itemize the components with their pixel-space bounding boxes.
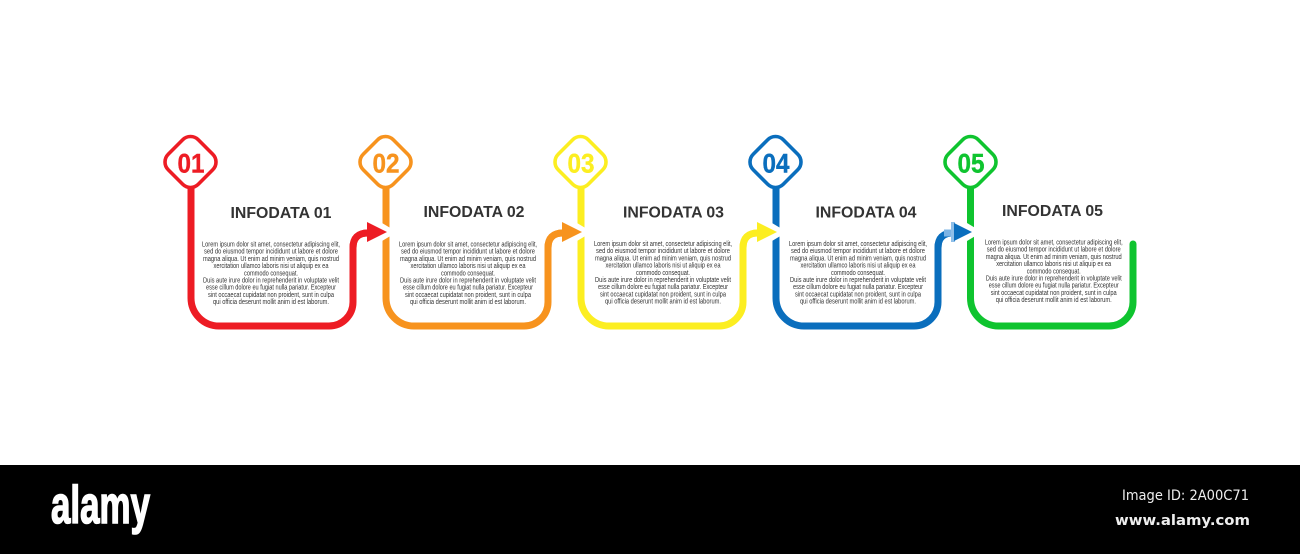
heading 03: INFODATA 03 xyxy=(623,204,724,222)
footer band xyxy=(0,465,1300,554)
body text 01: Lorem ipsum dolor sit amet, consectetur adipiscing elit, xyxy=(202,242,340,248)
body text 05: sed do eiusmod tempor incididunt ut labore et dolore xyxy=(987,247,1121,254)
body text 02 xyxy=(399,242,537,306)
badge 01: 01 xyxy=(178,148,204,178)
body text 04: magna aliqua. Ut enim ad minim veniam, quis nostrud xyxy=(790,255,926,262)
connector line 03 xyxy=(581,188,758,326)
connector line 02 xyxy=(386,188,563,326)
body text 04: Duis aute irure dolor in reprehenderit in voluptate velit xyxy=(790,277,926,284)
badge 02 xyxy=(355,132,416,192)
badge 04: 04 xyxy=(762,148,790,178)
body text 01: qui officia deserunt mollit anim id est laborum. xyxy=(213,299,329,306)
body text 05: Lorem ipsum dolor sit amet, consectetur adipiscing elit, xyxy=(985,240,1123,246)
body text 02: esse cillum dolore eu fugiat nulla pariatur. Excepteur xyxy=(403,285,534,292)
body text 02: sint occaecat cupidatat non proident, sunt in culpa xyxy=(405,292,531,299)
body text 03: Duis aute irure dolor in reprehenderit in voluptate velit xyxy=(595,277,731,284)
body text 02: Duis aute irure dolor in reprehenderit in voluptate velit xyxy=(400,278,536,284)
body text 05 xyxy=(985,240,1123,304)
badge 05: 05 xyxy=(958,148,984,178)
body text 03 xyxy=(594,241,732,306)
body text 03: qui officia deserunt mollit anim id est laborum. xyxy=(605,299,721,306)
heading 04: INFODATA 04 xyxy=(816,204,917,222)
body text 02: commodo consequat. xyxy=(441,270,495,277)
connector line 01 xyxy=(191,188,368,326)
body text 05: commodo consequat. xyxy=(1027,268,1081,275)
step 1: Infodata 01 xyxy=(160,132,368,326)
body text 05: xercitation ullamco laboris nisi ut aliquip ex ea xyxy=(996,261,1111,268)
body text 04: commodo consequat. xyxy=(831,270,885,277)
image id: Image ID: 2A00C71 xyxy=(1122,488,1249,504)
body text 05: esse cillum dolore eu fugiat nulla pariatur. Excepteur xyxy=(989,283,1119,290)
badge 02: 02 xyxy=(372,148,400,178)
body text 01: esse cillum dolore eu fugiat nulla pariatur. Excepteur xyxy=(206,285,337,292)
body text 03: esse cillum dolore eu fugiat nulla pariatur. Excepteur xyxy=(598,284,729,291)
badge 05 xyxy=(940,132,1001,192)
body text 05: qui officia deserunt mollit anim id est laborum. xyxy=(996,297,1112,304)
heading 05: INFODATA 05 xyxy=(1002,203,1103,220)
body text 01: magna aliqua. Ut enim ad minim veniam, quis nostrud xyxy=(203,256,339,263)
body text 04: xercitation ullamco laboris nisi ut aliquip ex ea xyxy=(800,263,916,270)
body text 01: sed do eiusmod tempor incididunt ut labore et dolore xyxy=(204,249,338,256)
badge 03: 03 xyxy=(568,148,594,178)
body text 04: esse cillum dolore eu fugiat nulla pariatur. Excepteur xyxy=(793,284,924,291)
step 2: Infodata 02 xyxy=(355,132,563,326)
arrow: 04 to 05 xyxy=(938,214,982,250)
arrow: 03 to 04 xyxy=(743,214,787,250)
arrow: 01 to 02 xyxy=(353,214,397,250)
badge 01 xyxy=(160,132,221,192)
badge 04 xyxy=(745,132,806,192)
body text 03: commodo consequat. xyxy=(636,270,690,277)
body text 04 xyxy=(789,241,927,306)
body text 05: Duis aute irure dolor in reprehenderit in voluptate velit xyxy=(986,276,1122,282)
body text 05: magna aliqua. Ut enim ad minim veniam, quis nostrud xyxy=(986,254,1122,261)
body text 01: commodo consequat. xyxy=(244,270,298,277)
body text 01: sint occaecat cupidatat non proident, sunt in culpa xyxy=(208,292,334,299)
connector line 05 xyxy=(970,188,1133,326)
body text 04: qui officia deserunt mollit anim id est laborum. xyxy=(800,299,916,306)
arrow: 02 to 03 xyxy=(548,214,592,250)
body text 04: sint occaecat cupidatat non proident, sunt in culpa xyxy=(795,291,921,298)
step 5: Infodata 05 xyxy=(940,132,1133,326)
step 4: Infodata 04 xyxy=(745,132,953,326)
step 3: Infodata 03 xyxy=(550,132,758,326)
body text 03: magna aliqua. Ut enim ad minim veniam, quis nostrud xyxy=(595,255,731,262)
alamy logo: alamy xyxy=(51,476,150,535)
body text 02: xercitation ullamco laboris nisi ut aliquip ex ea xyxy=(410,263,526,270)
body text 05: sint occaecat cupidatat non proident, sunt in culpa xyxy=(991,290,1117,297)
connector line 04 xyxy=(776,188,953,326)
body text 02: Lorem ipsum dolor sit amet, consectetur adipiscing elit, xyxy=(399,242,537,248)
body text 01: xercitation ullamco laboris nisi ut aliquip ex ea xyxy=(214,263,329,270)
body text 01: Duis aute irure dolor in reprehenderit in voluptate velit xyxy=(203,278,339,284)
heading 02: INFODATA 02 xyxy=(424,204,525,221)
body text 03: Lorem ipsum dolor sit amet, consectetur adipiscing elit, xyxy=(594,241,732,248)
body text 02: qui officia deserunt mollit anim id est laborum. xyxy=(410,299,526,306)
body text 02: magna aliqua. Ut enim ad minim veniam, quis nostrud xyxy=(400,256,536,263)
website: www.alamy.com xyxy=(1115,513,1250,529)
badge 03 xyxy=(550,132,611,192)
body text 03: xercitation ullamco laboris nisi ut aliquip ex ea xyxy=(606,263,721,270)
body text 04: Lorem ipsum dolor sit amet, consectetur adipiscing elit, xyxy=(789,241,927,248)
heading 01: INFODATA 01 xyxy=(230,205,332,222)
body text 03: sed do eiusmod tempor incididunt ut labore et dolore xyxy=(596,248,730,255)
body text 02: sed do eiusmod tempor incididunt ut labore et dolore xyxy=(401,249,535,256)
body text 03: sint occaecat cupidatat non proident, sunt in culpa xyxy=(600,291,726,298)
body text 04: sed do eiusmod tempor incididunt ut labore et dolore xyxy=(791,248,925,255)
body text 01 xyxy=(202,242,340,306)
